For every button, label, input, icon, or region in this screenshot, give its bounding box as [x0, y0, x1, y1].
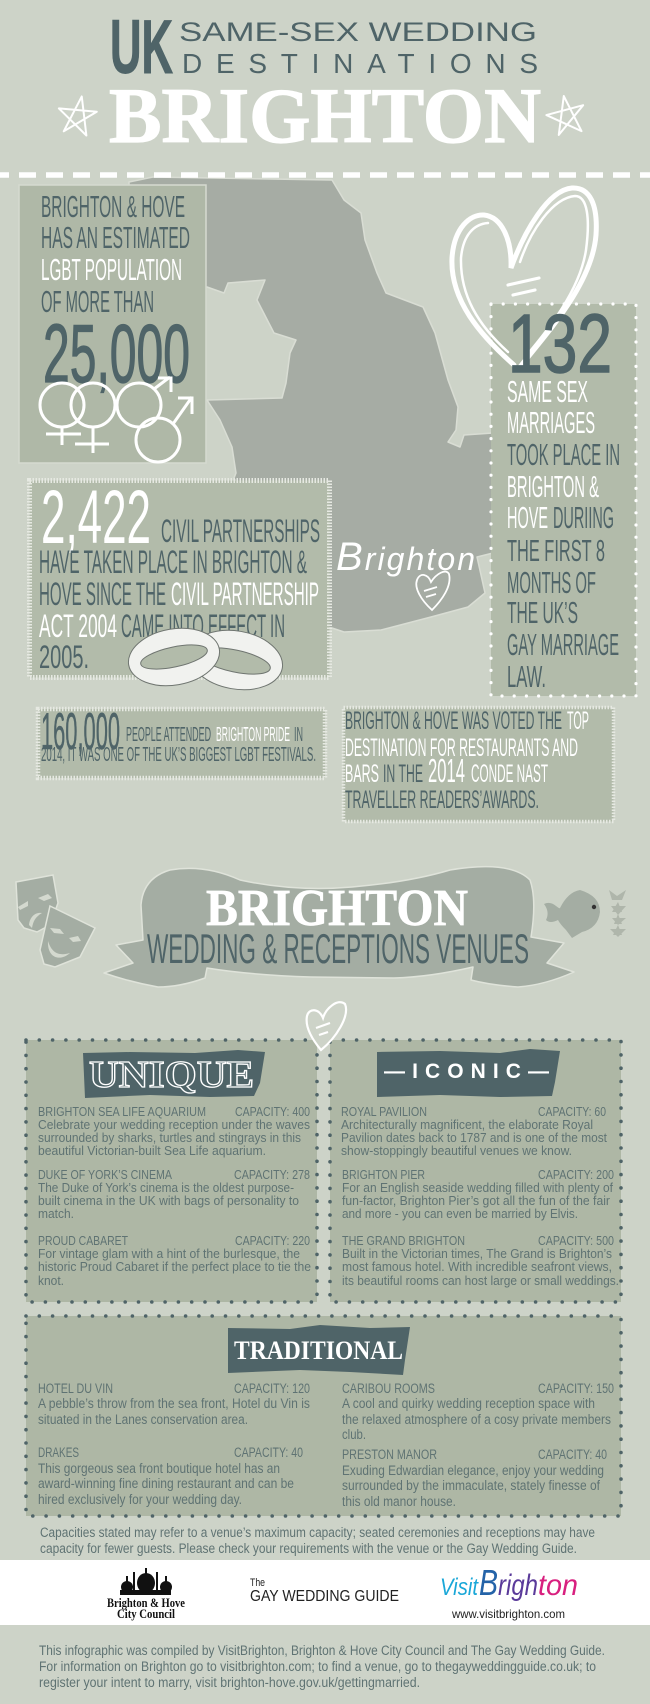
banner: traditional: TRADITIONAL: [234, 1336, 403, 1365]
venue: Caribou Rooms: the relaxed atmosphere of a cosy private members: [342, 1412, 611, 1427]
icon: wedding rings: [124, 621, 287, 697]
icon: left star: [56, 94, 99, 136]
banner: unique: UNIQUE: [89, 1054, 254, 1096]
title: UK: [110, 5, 173, 90]
venue: Sea Life Aquarium: beautiful Victorian-built Sea Life aquarium.: [38, 1144, 266, 1158]
panel: Conde Nast award: TOP: [567, 707, 589, 735]
logo: The Gay Wedding Guide: GAY WEDDING GUIDE: [250, 1588, 399, 1605]
venue: Sea Life Aquarium: [38, 1105, 310, 1158]
logo: VisitBrighton: righ: [498, 1569, 538, 1602]
venue: Duke of York's Cinema: match.: [38, 1207, 74, 1221]
icon: plants: [609, 890, 626, 937]
award text: [345, 707, 589, 814]
panel: unique venues: [26, 1040, 317, 1302]
banner: iconic: —ICONIC—: [384, 1060, 549, 1083]
venue: Royal Pavilion: CAPACITY: 60: [538, 1105, 606, 1119]
venue: Caribou Rooms: CAPACITY: 150: [538, 1381, 614, 1396]
ribbon banner: [104, 867, 574, 987]
venue: Hotel du Vin: HOTEL DU VIN: [38, 1381, 113, 1396]
icon: small map heart: [416, 572, 450, 610]
venue: Sea Life Aquarium: surrounded by sharks, turtles and stingrays in this: [38, 1131, 301, 1145]
venue: Brighton Pier: and more - you can even be married by Elvis.: [342, 1207, 578, 1221]
panel: iconic venues: [330, 1040, 621, 1302]
civil partnerships text: HOVE SINCE THE: [39, 576, 166, 612]
venue: Caribou Rooms: CARIBOU ROOMS: [342, 1381, 435, 1396]
number: 132: 132: [508, 297, 612, 390]
venue: Caribou Rooms: A cool and quirky wedding reception space with: [342, 1396, 595, 1411]
logo: The Gay Wedding Guide: [250, 1577, 399, 1605]
panel: Conde Nast award: [344, 707, 614, 822]
venue: Brighton Pier: BRIGHTON PIER: [342, 1168, 425, 1182]
venue: Brighton Pier: For an English seaside wedding filled with plenty of: [342, 1181, 613, 1195]
venue: Proud Cabaret: [38, 1234, 311, 1288]
icon: gender symbols: [40, 377, 192, 462]
venue: Drakes: award-winning fine dining restaurant and can be: [38, 1476, 294, 1491]
venue: Brighton Pier: [342, 1168, 614, 1221]
population text: OF MORE THAN: [41, 284, 154, 319]
venue: Drakes: hired exclusively for your wedding day.: [38, 1492, 242, 1507]
venue: Preston Manor: PRESTON MANOR: [342, 1447, 437, 1462]
panel: civil partnerships: CIVIL PARTNERSHIP: [171, 576, 319, 612]
logo: The Gay Wedding Guide: The: [250, 1577, 265, 1589]
title: [109, 5, 541, 159]
venue: Hotel du Vin: [38, 1381, 310, 1427]
venue: Brighton Pier: fun-factor, Brighton Pier’s got all the fun of the fair: [342, 1194, 610, 1208]
venue: Hotel du Vin: A pebble’s throw from the sea front, Hotel du Vin is: [38, 1396, 310, 1411]
venue: Drakes: This gorgeous sea front boutique hotel has an: [38, 1461, 280, 1476]
venue: Preston Manor: [342, 1447, 607, 1509]
venue: Proud Cabaret: knot.: [38, 1274, 64, 1288]
venue: Proud Cabaret: historic Proud Cabaret if the perfect place to tie the: [38, 1260, 311, 1274]
venue: Proud Cabaret: PROUD CABARET: [38, 1234, 128, 1248]
venue: Proud Cabaret: For vintage glam with a hint of the burlesque, the: [38, 1247, 300, 1261]
civil partnerships text: ACT 2004: [39, 608, 117, 644]
venue: Hotel du Vin: situated in the Lanes conservation area.: [38, 1412, 248, 1427]
title: SAME-SEX WEDDING: [179, 17, 537, 47]
venue: Sea Life Aquarium: Celebrate your wedding reception under the waves: [38, 1118, 310, 1132]
venue: Preston Manor: surrounded by the immaculate, stately finesse of: [342, 1478, 600, 1493]
panel: Brighton Pride: 160,000: [41, 703, 120, 761]
logo: VisitBrighton: B: [479, 1562, 498, 1603]
venue: Brighton Pier: CAPACITY: 200: [538, 1168, 614, 1182]
venue: Duke of York's Cinema: built cinema in the UK with bags of personality to: [38, 1194, 299, 1208]
venue: Drakes: CAPACITY: 40: [234, 1445, 303, 1460]
panel: traditional venues: [26, 1316, 621, 1516]
venue: Royal Pavilion: show-stoppingly beautiful venues we know.: [341, 1144, 572, 1158]
panel: civil partnerships: [30, 475, 330, 697]
venue: The Grand Brighton: [342, 1234, 619, 1288]
award text: BARS: [345, 760, 379, 788]
venue: Royal Pavilion: ROYAL PAVILION: [341, 1105, 427, 1119]
venue: Proud Cabaret: CAPACITY: 220: [235, 1234, 310, 1248]
banner: iconic: [377, 1049, 560, 1097]
pride text: BRIGHTON PRIDE: [216, 724, 290, 746]
venue: Royal Pavilion: Architecturally magnificent, the elaborate Royal: [341, 1118, 593, 1132]
venue: Hotel du Vin: CAPACITY: 120: [234, 1381, 310, 1396]
banner: traditional: [228, 1325, 410, 1375]
icon: fish: [544, 890, 600, 938]
venue: Duke of York's Cinema: CAPACITY: 278: [234, 1168, 310, 1182]
population text: LGBT POPULATION: [41, 252, 182, 287]
text: 2014, IT WAS ONE OF THE UK’S BIGGEST LGBT FESTIVALS.: [41, 744, 316, 766]
section heading: BRIGHTON: [206, 880, 468, 937]
award text: 2014: [428, 752, 465, 789]
Brighton script label on map: Brighton: [336, 535, 475, 579]
footer credits: For information on Brighton go to visitbrighton.com; to find a venue, go to thegayweddingguide.co.uk; to: [39, 1659, 596, 1674]
pride text: IN: [294, 724, 303, 746]
venue: Preston Manor: this old manor house.: [342, 1494, 456, 1509]
award text: IN THE: [383, 760, 423, 788]
venue: The Grand Brighton: CAPACITY: 500: [538, 1234, 614, 1248]
population text: BRIGHTON & HOVE: [41, 189, 185, 224]
title: DESTINATIONS: [182, 48, 538, 79]
venue: The Grand Brighton: THE GRAND BRIGHTON: [342, 1234, 465, 1248]
pride text: PEOPLE ATTENDED: [126, 724, 211, 746]
logo: VisitBrighton: [440, 1562, 578, 1621]
icon: heart over panels: [307, 1002, 346, 1050]
number: 2,422: 2,422: [41, 475, 151, 560]
marriages text: [507, 374, 620, 694]
venue: Duke of York's Cinema: [38, 1168, 310, 1221]
capacity note: [40, 1525, 595, 1556]
dashed divider line: [0, 172, 650, 178]
logo: Brighton & Hove City Council: City Council: [117, 1606, 175, 1621]
title: BRIGHTON: [109, 72, 541, 159]
civil partnerships text: HAVE TAKEN PLACE IN BRIGHTON &: [39, 544, 307, 580]
venue: The Grand Brighton: its beautiful rooms can host large or small weddings.: [342, 1274, 619, 1288]
venue: Drakes: [38, 1445, 303, 1507]
number: 25,000: 25,000: [43, 307, 190, 400]
population text: [41, 189, 190, 319]
civil partnerships text: [39, 513, 320, 675]
footer credits: register your intent to marry, visit brighton-hove.gov.uk/gettingmarried.: [39, 1675, 420, 1690]
venue: Royal Pavilion: [341, 1105, 607, 1158]
civil partnerships text: 2005.: [39, 639, 89, 675]
logo band: [0, 1560, 650, 1625]
venue: Caribou Rooms: [342, 1381, 614, 1442]
award text: CONDE NAST: [471, 760, 548, 788]
logo: VisitBrighton: ton: [538, 1569, 578, 1602]
venue: Duke of York's Cinema: DUKE OF YORK’S CINEMA: [38, 1168, 173, 1182]
map of England: [129, 177, 493, 632]
marriages text: HOVE: [507, 500, 548, 535]
venue: The Grand Brighton: Built in the Victorian times, The Grand is Brighton’s: [342, 1247, 612, 1261]
capacity note: capacity for fewer guests. Please check your requirements with the venue or the Gay Wedding Guide.: [40, 1541, 577, 1556]
venue: Preston Manor: Exuding Edwardian elegance, enjoy your wedding: [342, 1463, 604, 1478]
logo: VisitBrighton: Visit: [440, 1574, 479, 1601]
footer credits: [39, 1643, 605, 1690]
venue: Sea Life Aquarium: BRIGHTON SEA LIFE AQUARIUM: [38, 1105, 206, 1119]
icon: right star: [543, 92, 588, 138]
logo: Brighton & Hove City Council: [107, 1568, 185, 1621]
section heading: [147, 880, 529, 972]
venue: Preston Manor: CAPACITY: 40: [538, 1447, 607, 1462]
marriages text block: [507, 297, 620, 694]
icon: theatre masks: [16, 875, 95, 967]
venue: Sea Life Aquarium: CAPACITY: 400: [235, 1105, 310, 1119]
panel: 132 marriages background: [491, 304, 636, 696]
venue: Royal Pavilion: Pavilion dates back to 1787 and is one of the most: [341, 1131, 607, 1145]
marriages text: THE UK’S: [507, 595, 578, 630]
panel: Brighton Pride: [38, 703, 325, 778]
venue: Caribou Rooms: club.: [342, 1427, 366, 1442]
logo: Brighton & Hove City Council: Brighton & Hove: [107, 1595, 185, 1610]
venue: Duke of York's Cinema: The Duke of York’s cinema is the oldest purpose-: [38, 1181, 294, 1195]
marriages text: LAW.: [507, 659, 546, 694]
pride text: [41, 724, 316, 766]
civil partnerships text: CAME INTO EFFECT IN: [121, 608, 285, 644]
panel: civil partnerships: CIVIL PARTNERSHIPS: [161, 513, 320, 549]
population text: HAS AN ESTIMATED: [41, 220, 190, 255]
venue: Drakes: DRAKES: [38, 1445, 79, 1460]
panel: LGBT population: [19, 185, 206, 463]
logo: VisitBrighton: www.visitbrighton.com: [451, 1607, 565, 1621]
venue: The Grand Brighton: most famous hotel. With incredible seafront views,: [342, 1260, 612, 1274]
icon: large white heart: [452, 188, 596, 367]
Brighton script label on map: [336, 535, 475, 610]
